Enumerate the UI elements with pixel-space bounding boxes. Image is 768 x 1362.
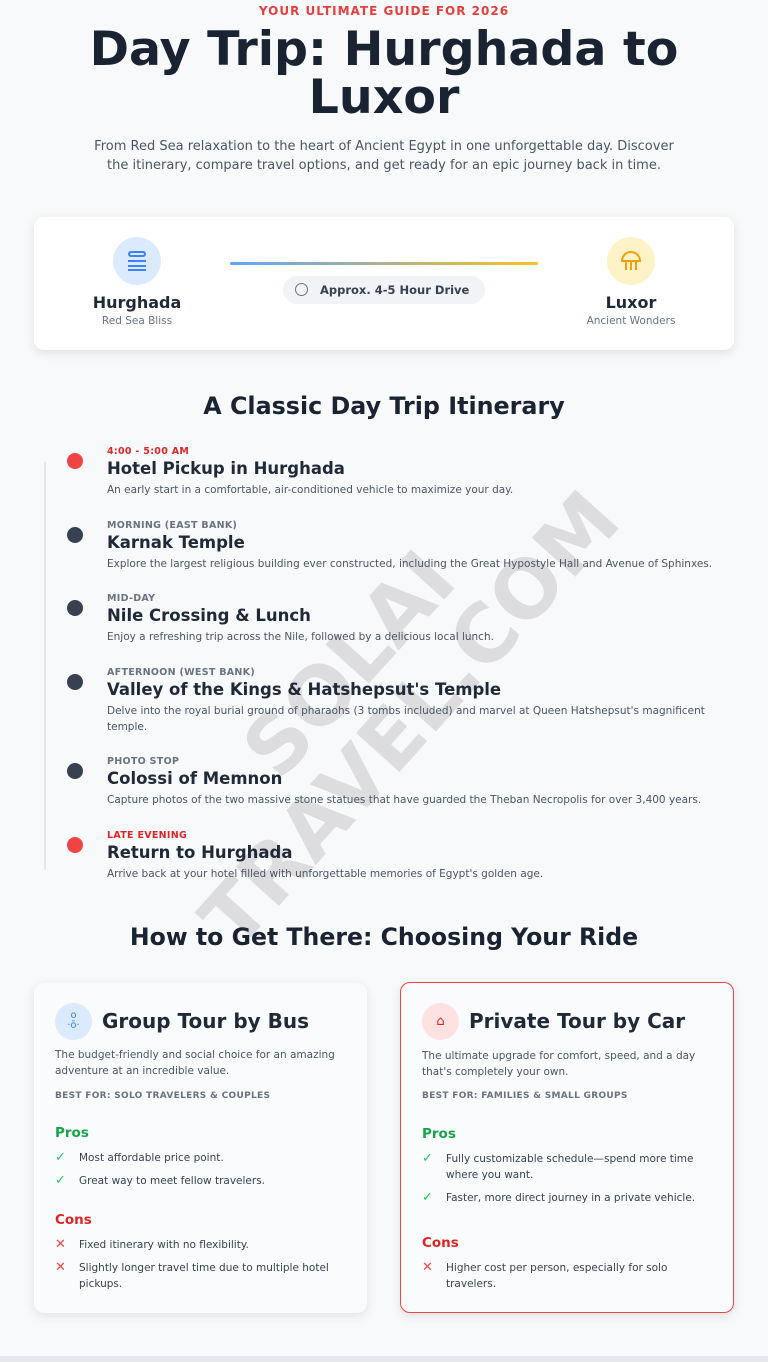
step 3: Nile Crossing & Lunch xyxy=(107,606,311,625)
step 6 xyxy=(67,830,543,880)
step 6: Return to Hurghada xyxy=(107,843,292,862)
pros: Pros xyxy=(55,1125,89,1141)
step 6: LATE EVENING xyxy=(107,830,187,841)
cons: Cons xyxy=(422,1235,459,1251)
icon: bus: o xyxy=(70,1010,77,1021)
icon: car: ⌂ xyxy=(436,1014,445,1029)
step 3: Enjoy a refreshing trip across the Nile, followed by a delicious local lunch. xyxy=(107,631,494,643)
title xyxy=(90,22,678,125)
card: private tour: The ultimate upgrade for comfort, speed, and a day that's completely your own. xyxy=(422,1050,695,1078)
step 2: MORNING (EAST BANK) xyxy=(107,520,237,531)
hurghada label xyxy=(93,293,181,327)
card: group tour: The budget-friendly and social choice for an amazing adventure at an incredible value. xyxy=(55,1049,335,1077)
pros: Pros xyxy=(422,1126,456,1142)
luxor label: Ancient Wonders xyxy=(587,315,675,327)
icon: hurghada xyxy=(113,237,161,285)
step 4 xyxy=(67,667,705,733)
card: private tour xyxy=(400,982,734,1313)
step 5: Capture photos of the two massive stone statues that have guarded the Theban Necropolis for over 3,400 years. xyxy=(107,794,701,806)
icon: car xyxy=(422,1003,459,1040)
card: group tour: Most affordable price point. xyxy=(79,1152,224,1164)
icon: bus xyxy=(55,1003,92,1040)
watermark: SOLAI xyxy=(225,533,473,795)
step 5: Colossi of Memnon xyxy=(107,769,282,788)
step 5: PHOTO STOP xyxy=(107,756,179,767)
subtitle: the itinerary, compare travel options, and get ready for an epic journey back in time. xyxy=(107,158,661,173)
ride heading: How to Get There: Choosing Your Ride xyxy=(130,923,638,951)
card: group tour: Great way to meet fellow travelers. xyxy=(79,1175,265,1187)
card: private tour: Higher cost per person, especially for solo travelers. xyxy=(446,1262,667,1290)
card: private tour: ✓ xyxy=(422,1190,433,1205)
subtitle: From Red Sea relaxation to the heart of Ancient Egypt in one unforgettable day. Discover xyxy=(94,139,674,154)
step 2 xyxy=(67,520,712,570)
card: group tour: ✓ xyxy=(55,1173,66,1188)
duration pill xyxy=(283,276,485,304)
title: Private Tour by Car xyxy=(469,1009,685,1033)
hurghada label: Hurghada xyxy=(93,293,181,312)
card: group tour: Slightly longer travel time due to multiple hotel pickups. xyxy=(79,1262,329,1290)
subtitle xyxy=(94,139,674,173)
duration pill: Approx. 4-5 Hour Drive xyxy=(320,283,469,297)
route line xyxy=(230,262,538,265)
step 4: Valley of the Kings & Hatshepsut's Temple xyxy=(107,680,501,699)
step 1 xyxy=(67,446,513,496)
card: private tour: Faster, more direct journey in a private vehicle. xyxy=(446,1192,695,1204)
step 1: 4:00 - 5:00 AM xyxy=(107,446,189,457)
step 1: Hotel Pickup in Hurghada xyxy=(107,459,345,478)
card: group tour: ✓ xyxy=(55,1150,66,1165)
card: private tour: Fully customizable schedule—spend more time where you want. xyxy=(446,1153,693,1181)
cons: Cons xyxy=(55,1212,92,1228)
title: Luxor xyxy=(309,70,459,125)
step 4: Delve into the royal burial ground of pharaohs (3 tombs included) and marvel at Queen Hatshepsut's magnificent temple. xyxy=(107,705,705,733)
card: group tour: ✕ xyxy=(55,1237,66,1252)
itinerary heading: A Classic Day Trip Itinerary xyxy=(203,392,565,420)
step 3 xyxy=(67,593,494,643)
watermark: TRAVEL.COM xyxy=(183,474,638,965)
luxor label xyxy=(586,293,675,327)
step 1: An early start in a comfortable, air-conditioned vehicle to maximize your day. xyxy=(107,484,513,496)
card: group tour xyxy=(34,983,367,1313)
title: Group Tour by Bus xyxy=(102,1009,309,1033)
step 2: Karnak Temple xyxy=(107,533,245,552)
card: group tour: ✕ xyxy=(55,1260,66,1275)
luxor label: Luxor xyxy=(606,293,656,312)
step 4: AFTERNOON (WEST BANK) xyxy=(107,667,255,678)
icon: luxor xyxy=(607,237,655,285)
step 2: Explore the largest religious building ever constructed, including the Great Hypostyle Hall and Avenue of Sphinxes. xyxy=(107,558,712,570)
step 5 xyxy=(67,756,701,806)
card: private tour: BEST FOR: FAMILIES & SMALL GROUPS xyxy=(422,1091,628,1101)
card: private tour: ✕ xyxy=(422,1260,433,1275)
icon: bus: ·ō· xyxy=(67,1020,80,1031)
bottom strip xyxy=(0,1356,768,1362)
card: private tour: ✓ xyxy=(422,1151,433,1166)
title: Day Trip: Hurghada to xyxy=(90,22,678,77)
eyebrow: YOUR ULTIMATE GUIDE FOR 2026 xyxy=(259,4,509,18)
step 3: MID-DAY xyxy=(107,593,155,604)
route card xyxy=(34,217,734,350)
timeline xyxy=(44,446,712,880)
hurghada label: Red Sea Bliss xyxy=(102,315,172,327)
card: group tour: BEST FOR: SOLO TRAVELERS & COUPLES xyxy=(55,1091,270,1101)
step 6: Arrive back at your hotel filled with unforgettable memories of Egypt's golden age. xyxy=(107,868,543,880)
card: group tour: Fixed itinerary with no flexibility. xyxy=(79,1239,249,1251)
